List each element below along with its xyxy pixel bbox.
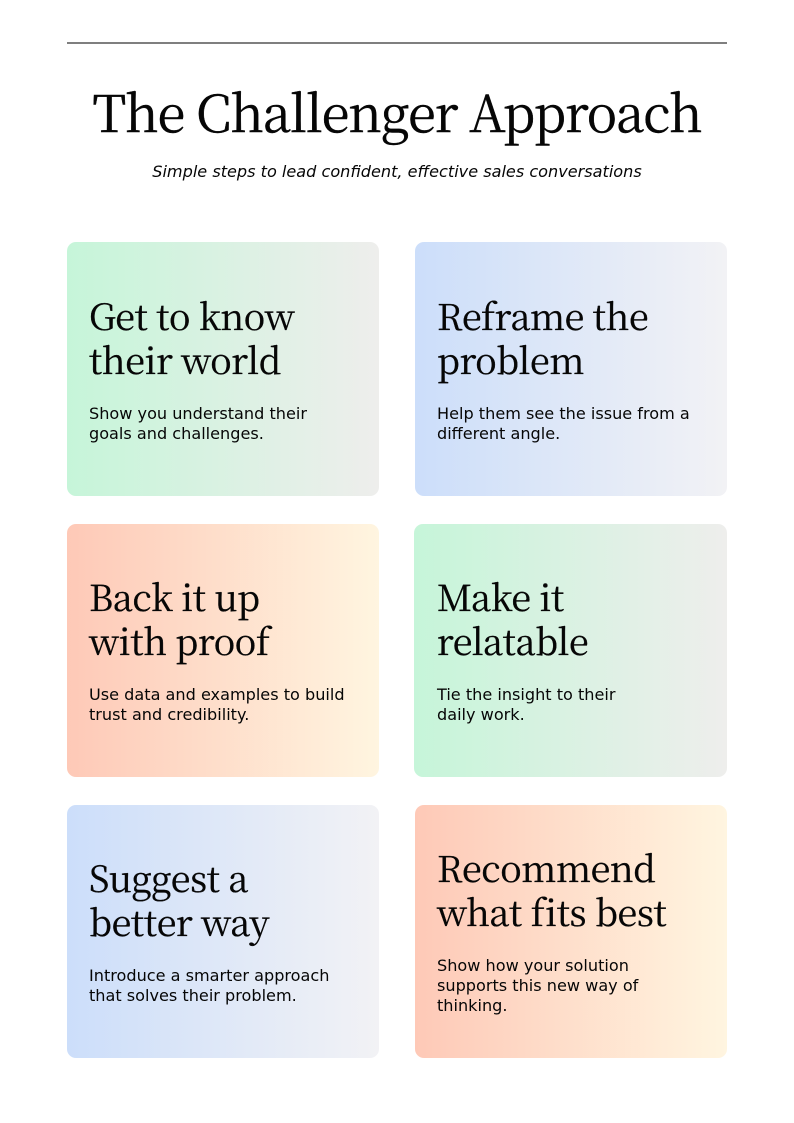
panel: reframe the problem: [415, 242, 727, 496]
text block: Tie the insight to their: [437, 685, 616, 704]
text block: different angle.: [437, 424, 560, 443]
heading: Suggest a: [89, 852, 248, 902]
text block: thinking.: [437, 996, 508, 1014]
heading: problem: [437, 334, 584, 385]
text block: daily work.: [437, 705, 525, 724]
panel: suggest a better way: [67, 804, 379, 1058]
text block: [89, 404, 307, 443]
heading: what fits best: [437, 886, 666, 936]
heading: [89, 290, 295, 385]
text block: [437, 404, 690, 443]
text block: [437, 956, 639, 1014]
text block: [436, 685, 616, 724]
heading: [89, 852, 270, 946]
text block: Introduce a smarter approach: [89, 966, 329, 984]
heading: [88, 571, 272, 666]
panel: recommend what fits best: [415, 804, 727, 1058]
heading: their world: [89, 334, 281, 385]
subtitle: Simple steps to lead confident, effective sales conversations: [152, 162, 642, 181]
panel: back it up with proof: [67, 524, 379, 777]
text block: [89, 966, 329, 1004]
heading: better way: [89, 896, 269, 946]
heading: Reframe the: [437, 290, 648, 341]
heading: Back it up: [89, 571, 260, 622]
text block: [89, 685, 345, 724]
text block: supports this new way of: [437, 976, 638, 994]
heading: relatable: [437, 615, 588, 666]
panel: make it relatable: [414, 524, 727, 777]
heading: [437, 290, 648, 385]
text block: Use data and examples to build: [89, 685, 345, 704]
text block: trust and credibility.: [89, 705, 249, 724]
text block: Show you understand their: [89, 404, 307, 423]
title: The Challenger Approach: [92, 73, 702, 147]
text block: Help them see the issue from a: [437, 404, 690, 423]
text block: Show how your solution: [437, 956, 629, 974]
heading: Recommend: [437, 842, 656, 892]
heading: Make it: [437, 571, 564, 622]
heading: [436, 842, 666, 936]
panel: get to know their world: [67, 242, 379, 496]
heading: [437, 571, 588, 666]
text block: goals and challenges.: [89, 424, 264, 443]
heading: Get to know: [89, 290, 295, 341]
text block: that solves their problem.: [89, 986, 297, 1004]
heading: with proof: [89, 615, 269, 666]
